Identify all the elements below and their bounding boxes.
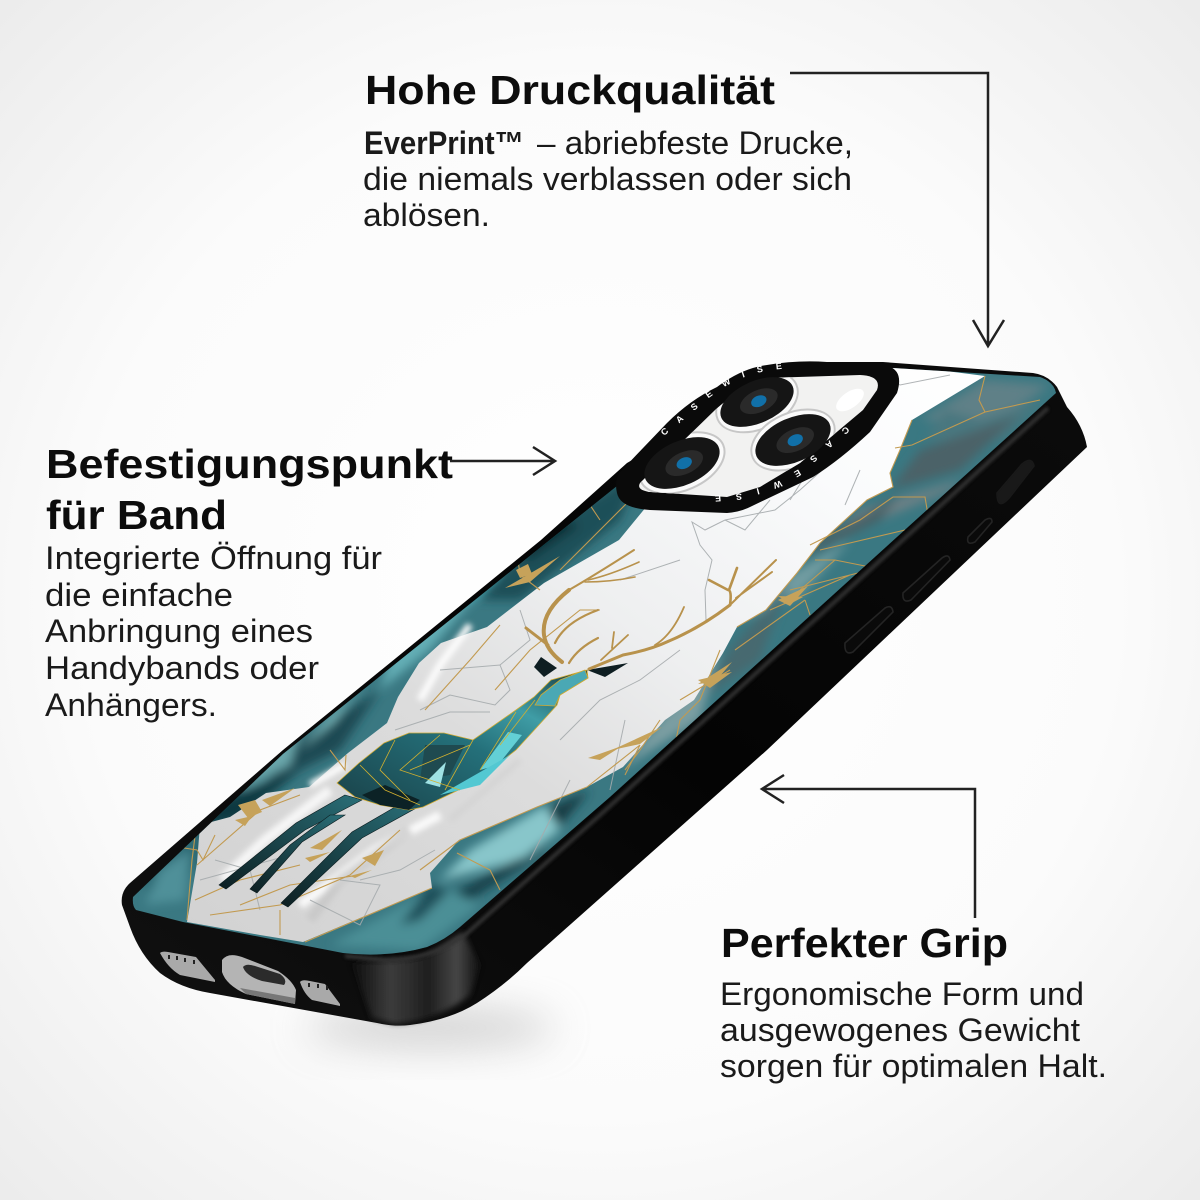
bottom corner glare [352,932,480,1024]
charging port [222,955,296,1004]
side buttons [845,460,1034,653]
brand text bottom: CASEWISE [715,427,849,502]
arrow: strap attachment [450,447,555,475]
speaker grille right [300,980,340,1006]
text block: print quality: – abriebfeste Drucke, [537,125,853,161]
heading: strap attachment: Befestigungspunkt [46,441,453,487]
deer body lines [360,700,535,805]
deer head [535,670,588,706]
lens 3 [637,427,727,499]
deer antlers [526,550,776,669]
text block: strap attachment: die einfache [45,577,233,613]
callout: grip [720,920,1107,1084]
text block: strap attachment [45,540,382,723]
gold veins [165,376,1040,942]
heading: grip: Perfekter Grip [721,920,1008,966]
deer legs [219,795,420,907]
phone case with marble print [122,361,1087,1028]
teal base [132,368,1056,955]
phone shadow [305,1008,555,1048]
deer ears [534,657,628,677]
rim highlight [345,408,1048,960]
heading: print quality: Hohe Druckqualität [365,67,775,113]
camera ring [616,361,899,513]
marble shading [218,620,476,919]
case side walls [122,362,1087,1026]
heading: strap attachment: für Band [46,492,227,538]
lens 2 [748,404,838,476]
speaker grille left [160,952,215,982]
deer [219,550,776,907]
text block: print quality: die niemals verblassen oder sich [363,161,852,197]
teal mottling [140,380,1050,950]
text block: grip [720,976,1107,1084]
text block: print quality: ablösen. [363,197,490,233]
text block: grip: Ergonomische Form und [720,976,1084,1012]
text block: strap attachment: Anbringung eines [45,613,313,649]
text block: print quality: EverPrint™ [364,125,524,161]
callout: print quality [363,67,853,233]
arrow: grip [762,775,975,918]
text block: strap attachment: Handybands oder [45,650,319,686]
grey marble veins [200,360,950,925]
text block: print quality [363,125,853,233]
brand text top: CASEWISE [661,363,782,435]
text block: grip: ausgewogenes Gewicht [720,1012,1080,1048]
marble white areas [187,360,985,942]
heading: strap attachment [46,441,453,538]
camera lens islands [640,377,836,494]
arrow: print quality [790,73,1004,346]
printed back face [132,368,1056,955]
text block: grip: sorgen für optimalen Halt. [720,1048,1107,1084]
deer dark and bright segments [362,732,522,810]
gold leaves [235,556,808,878]
camera window [639,375,878,497]
camera bump [616,361,900,513]
lens 1 [713,367,801,437]
text block: strap attachment: Anhängers. [45,687,217,723]
callout: strap attachment [45,441,453,723]
deer body and neck [337,670,588,810]
text block: strap attachment: Integrierte Öffnung für [45,540,382,576]
camera flash [832,384,868,416]
